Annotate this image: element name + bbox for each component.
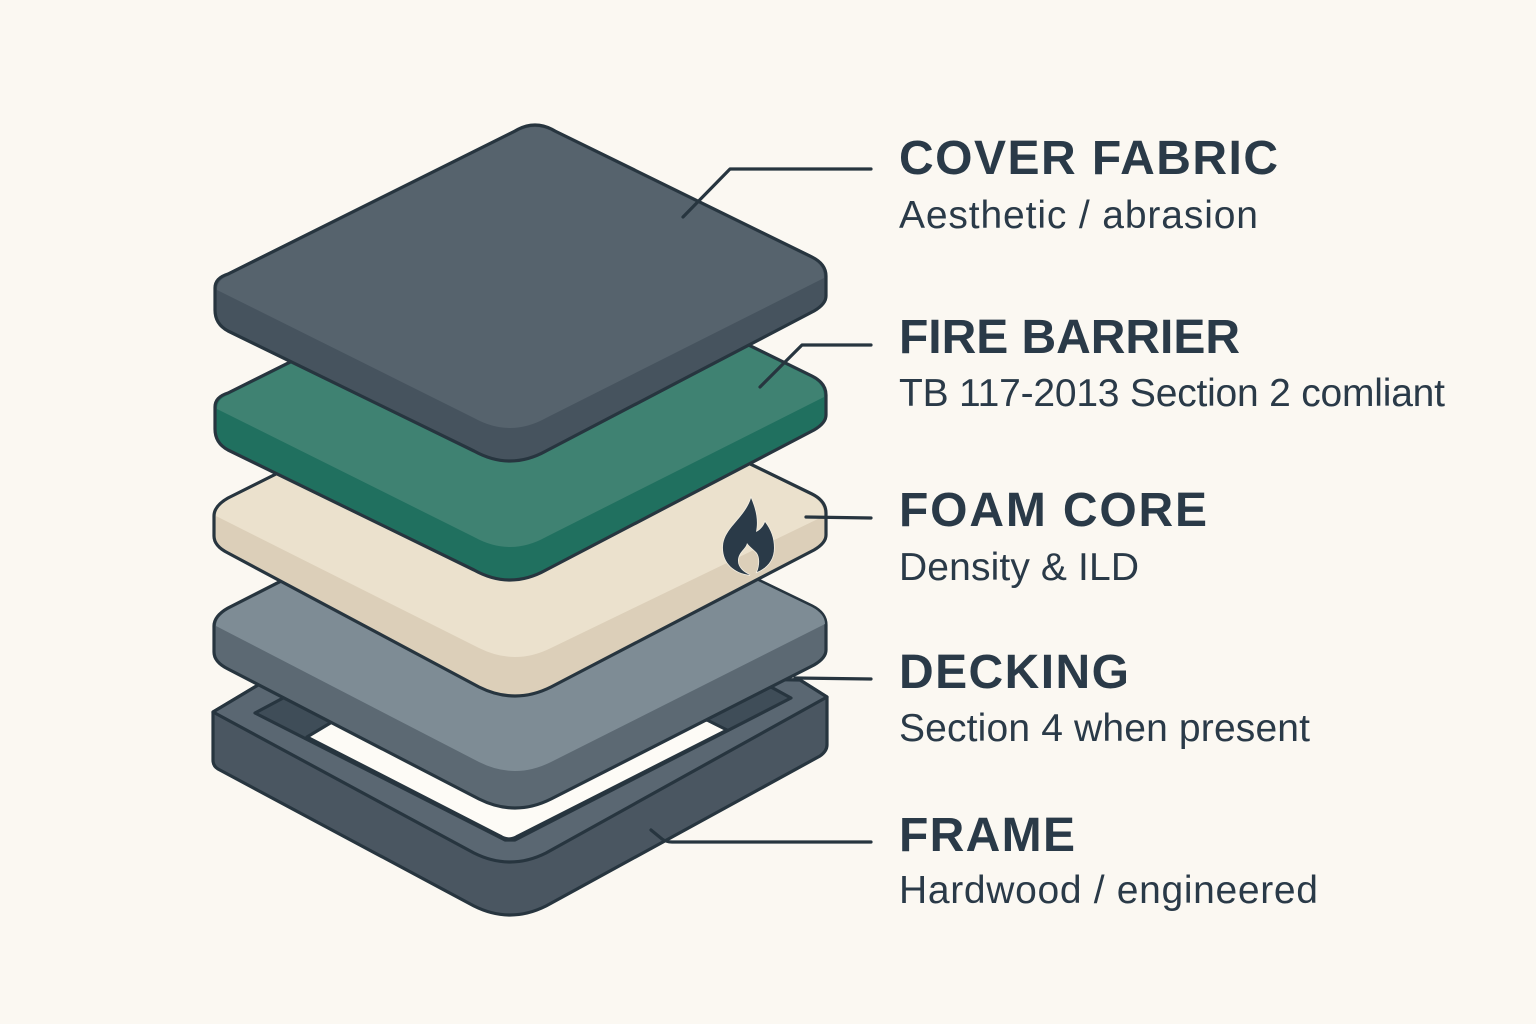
label: frame: FRAME [899, 809, 1075, 862]
leader: decking [795, 678, 871, 679]
layer: decking [214, 462, 826, 808]
layer: cover fabric [215, 125, 826, 461]
layer: frame [213, 672, 827, 915]
label: decking [899, 646, 1310, 750]
leader: cover fabric [683, 169, 871, 217]
label: foam core: Density & ILD [899, 546, 1139, 589]
leader: foam core [806, 517, 871, 518]
label: cover fabric [899, 132, 1278, 237]
label: fire barrier: TB 117-2013 Section 2 comliant [899, 372, 1445, 415]
label: decking: DECKING [899, 646, 1129, 699]
leader: frame [651, 830, 871, 842]
layer: fire barrier [215, 244, 826, 580]
label: fire barrier: FIRE BARRIER [899, 311, 1240, 364]
label: cover fabric: Aesthetic / abrasion [899, 194, 1258, 237]
layer: foam core [214, 352, 826, 696]
label: fire barrier [899, 311, 1445, 415]
label: cover fabric: COVER FABRIC [899, 132, 1278, 185]
label: frame: Hardwood / engineered [899, 869, 1318, 912]
label: decking: Section 4 when present [899, 707, 1310, 750]
icon: flame [723, 498, 774, 575]
label: foam core: FOAM CORE [899, 484, 1207, 537]
label: foam core [899, 484, 1207, 589]
leader: fire barrier [760, 345, 871, 387]
label: frame [899, 809, 1318, 912]
layer stack illustration [213, 125, 827, 915]
